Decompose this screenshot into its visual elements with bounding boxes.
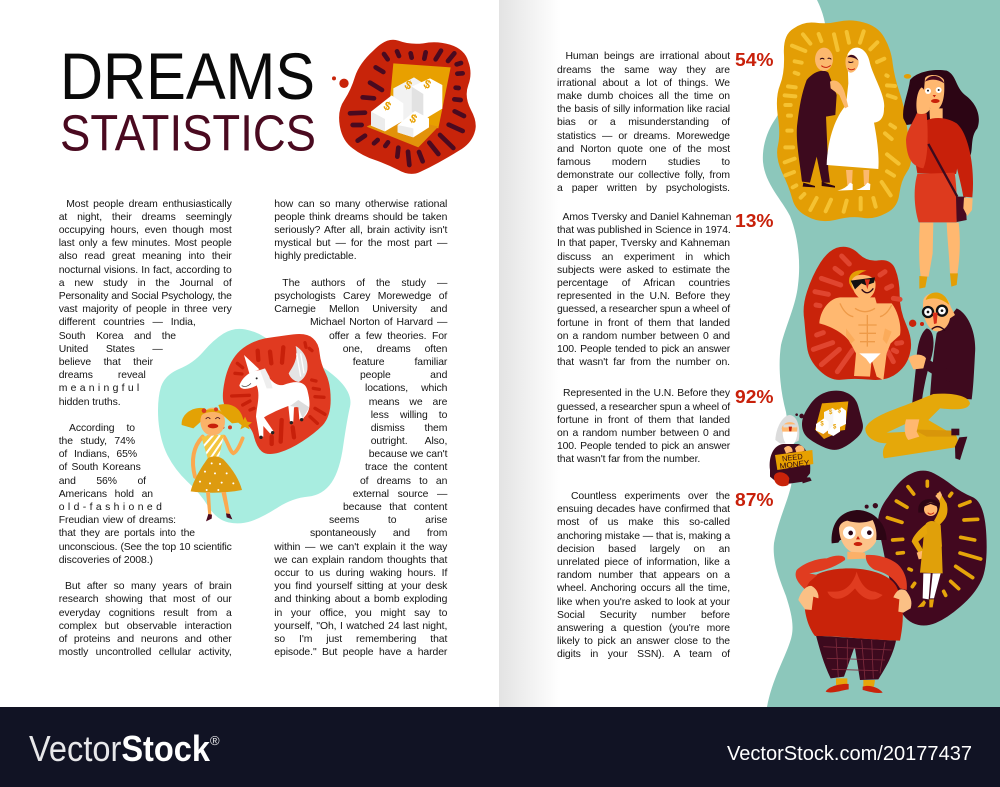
text column: left page, first column: believe that their	[59, 357, 153, 368]
dream cloud: muscle man	[804, 247, 911, 380]
dream cloud: wedding couple	[777, 20, 911, 221]
title line: dreams: DREAMS	[60, 39, 315, 113]
text column: left page, second column: Carnegie Mellon University and	[274, 304, 447, 315]
text column: left page, second column: because we can't	[369, 449, 447, 460]
footer image id: VectorStock.com/20177437	[727, 743, 972, 765]
text block: 87% paragraph: decision based largely on an	[557, 544, 730, 555]
text block: 87% paragraph: Social Security number before	[557, 610, 730, 621]
stat: 87%: 87%	[735, 490, 774, 510]
dream cloud: money case: $	[820, 421, 824, 427]
text block: 87% paragraph	[557, 491, 730, 660]
text column: left page, second column: seriously? After all, brain activity isn't	[274, 225, 447, 236]
text column: left page, first column: complex but observable interaction	[59, 621, 232, 632]
text column: left page, second column: highly predictable.	[274, 251, 357, 262]
text block: 87% paragraph: most of us make this so-called	[557, 517, 730, 528]
text column: left page, first column	[58, 199, 232, 658]
text block: 92% paragraph: 100. People tended to pick an answer	[557, 441, 730, 452]
text block: 92% paragraph: on a random number between 0 and	[557, 428, 730, 439]
text column: left page, first column: a new study in the Journal of	[59, 278, 232, 289]
text column: left page, first column: unconscious. (See the top 10 scientific	[59, 542, 232, 553]
text block: 13% paragraph: that was published in Science in 1974.	[557, 225, 731, 236]
icon: money case in red dream cloud: $	[402, 77, 415, 93]
text block: 92% paragraph	[557, 388, 730, 465]
footer logo: VectorStock: VectorStock	[29, 728, 211, 769]
stat: 92%: 92%	[735, 387, 774, 407]
text column: left page, second column: less willing to	[371, 410, 447, 421]
text column: left page, second column: people think dreams should be taken	[274, 212, 447, 223]
sign text: NEED	[782, 452, 804, 463]
text block: 54% paragraph: the basis of silly information like racial	[557, 104, 730, 115]
illustration: man dreaming of a muscular body	[770, 247, 975, 486]
text column: left page, first column: and 56% of	[59, 476, 146, 487]
text column: left page, first column: Americans hold an	[59, 489, 153, 500]
text column: left page, first column: of Indians, 65%	[59, 449, 137, 460]
text column: left page, first column: hidden truths.	[59, 396, 121, 408]
text column: left page, first column: the study, 74%	[59, 436, 135, 447]
text block: 13% paragraph: guessed, a researcher spun a wheel of	[557, 304, 730, 315]
illustration: heavy woman dreaming of being slim	[796, 471, 987, 693]
title	[60, 39, 316, 162]
text block: 92% paragraph: guessed, a researcher spun a wheel of	[557, 402, 730, 413]
text column: left page, second column: occur to us during waking hours. If	[274, 568, 447, 579]
dream cloud: money case: $	[833, 425, 837, 431]
text column: left page, second column: feature familiar	[353, 357, 447, 368]
text block: 13% paragraph	[557, 212, 731, 368]
sign text: MONEY	[779, 458, 810, 471]
text block: 13% paragraph: In that paper, Tversky and Kahneman	[557, 238, 730, 249]
text column: left page, second column: locations, which	[365, 383, 447, 394]
text column: left page, first column: also read great meaning into their	[59, 251, 232, 262]
text block: 92% paragraph: Represented in the U.N. Before they	[563, 388, 730, 399]
text block: 54% paragraph: dreams the same way they are	[557, 65, 730, 76]
text column: left page, second column: how can so many otherwise rational	[274, 199, 447, 210]
text column: left page, second column: of dreams to an	[360, 476, 447, 487]
text block: 54% paragraph: Human beings are irrational about	[566, 51, 730, 62]
text block: 13% paragraph: subjects were asked to estimate the	[557, 265, 730, 276]
text column: left page, first column: that they are portals into the	[59, 528, 195, 539]
illustration: woman dreaming of a wedding	[777, 20, 979, 289]
text column: left page, first column: dreams reveal	[59, 370, 146, 381]
text block: 87% paragraph: anchoring mistake — that is, making a	[557, 531, 730, 542]
dream cloud: slim woman	[878, 471, 987, 625]
text column: left page, second column: spontaneously and from	[310, 528, 447, 539]
text block: 54% paragraph	[557, 51, 730, 194]
text column: left page, first column: Freudian view of dreams:	[59, 515, 176, 526]
woman with phone and bag	[903, 70, 979, 289]
text block: 54% paragraph: demonstrate our collective folly, from	[557, 170, 730, 181]
footer registered mark: ®	[210, 733, 220, 748]
text column: left page, first column: everyday cognitions result from a	[59, 608, 232, 618]
text block: 13% paragraph: represented in the U.N. Before they	[557, 291, 730, 302]
text column: left page, first column: Most people dream enthusiastically	[66, 199, 232, 210]
text block: 92% paragraph: that wasn't far from the number.	[557, 454, 700, 465]
text column: left page, second column: offer a few theories. For	[329, 331, 447, 342]
text column: left page, second column: within — we can't explain it the way	[274, 542, 447, 553]
illustration: girl dreaming of a unicorn	[158, 329, 350, 523]
text block: 87% paragraph: ensuing decades have confirmed that	[557, 504, 730, 515]
text column: left page, second column: yourself, "Oh, I watched 24 last night,	[274, 621, 447, 632]
dream cloud: money case: $	[838, 409, 842, 415]
text column: left page, first column: research showing that most of our	[59, 594, 232, 605]
text column: left page, first column: South Korea and the	[59, 331, 176, 342]
text column: left page, second column: psychologists Carey Morewedge of	[274, 291, 447, 302]
text block: 54% paragraph: statistics — or dreams. Morewedge	[557, 131, 730, 142]
text column: left page, second column: Michael Norton of Harvard —	[310, 317, 447, 328]
text column: left page, second column: external source —	[353, 489, 447, 500]
text column: left page, second column: outright. Also,	[371, 436, 447, 447]
footer band	[0, 707, 1000, 787]
text column: left page, second column: people and	[360, 370, 447, 381]
text block: 13% paragraph: fortune in front of them that landed	[557, 318, 730, 329]
text block: 54% paragraph: irrational about a lot of things. We	[557, 78, 730, 89]
text column: left page, second column: we can explain random thoughts that	[274, 555, 447, 566]
title line: statistics: STATISTICS	[60, 104, 316, 162]
text block: 87% paragraph: likely to pick an answer close to the	[557, 636, 730, 647]
stat: 13%: 13%	[735, 211, 774, 231]
text column: left page, second column: means we are	[369, 396, 447, 408]
text column: left page, first column: vast majority of people in three very	[59, 304, 232, 315]
text block: 13% paragraph: Amos Tversky and Daniel Kahneman	[562, 212, 731, 223]
text block: 13% paragraph: 100. People tended to pick an answer	[557, 344, 730, 355]
dream cloud: money case: $	[829, 410, 833, 416]
text block: 54% paragraph: famous modern studies to	[557, 157, 730, 168]
text block: 87% paragraph: wheel. Anchoring occurs all the time,	[557, 583, 730, 594]
text column: left page, second column: you find yourself sitting at your desk	[274, 581, 447, 592]
text column: left page, first column: old-fashioned	[59, 502, 165, 513]
text column: left page, first column: nocturnal visions. In fact, according to	[59, 265, 232, 276]
text column: left page, second column	[274, 199, 448, 658]
text block: 87% paragraph: answering a question (you're more	[557, 623, 730, 634]
text block: 13% paragraph: that wasn't far from the number on.	[557, 357, 730, 368]
text block: 13% paragraph: on a random number between 0 and	[557, 331, 730, 342]
text column: left page, second column: trace the content	[365, 462, 447, 473]
text column: left page, first column: mostly uncontrolled cellular activity,	[59, 647, 232, 658]
text column: left page, second column: The authors of the study —	[282, 278, 447, 289]
text column: left page, second column: episode." But people have a harder	[274, 647, 447, 658]
text column: left page, second column: dismiss them	[371, 423, 447, 434]
heavy woman	[796, 503, 911, 693]
text column: left page, first column: of South Koreans	[59, 462, 141, 473]
text column: left page, first column: of proteins and neurons and other	[59, 634, 232, 645]
text column: left page, second column: so I'm just remembering that	[274, 634, 447, 645]
stat: 54%: 54%	[735, 50, 774, 70]
text column: left page, first column: last only a few minutes. Most people	[59, 238, 232, 249]
man with glasses	[865, 292, 975, 460]
text column: left page, second column: and thinking about a bomb exploding	[274, 594, 447, 605]
sign text	[778, 451, 810, 471]
text block: 54% paragraph: bias or a misunderstanding of	[557, 117, 730, 128]
text block: 87% paragraph: random number that appears on a	[557, 570, 730, 581]
text column: left page, second column: mystical but — for the most part —	[274, 238, 447, 249]
text column: left page, first column: discoveries of 2008.)	[59, 555, 153, 566]
text block: 13% paragraph: discuss an experiment in which	[557, 252, 730, 263]
page gutter shadow	[499, 0, 561, 707]
icon: money case in red dream cloud: $	[421, 77, 434, 92]
text block: 87% paragraph: like when you're asked to look at your	[557, 597, 730, 608]
text column: left page, first column: different countries — India,	[59, 317, 196, 328]
text block: 54% paragraph: a paper written by psychologists.	[557, 183, 730, 194]
text column: left page, second column: one, dreams often	[343, 344, 447, 355]
text column: left page, second column: in your office, you might say to	[274, 608, 447, 618]
icon: money case in red dream cloud: $	[381, 98, 394, 114]
text block: 54% paragraph: make dumb choices all the time on	[557, 91, 730, 102]
text column: left page, first column: But after so many years of brain	[65, 581, 232, 592]
text column: left page, first column: at night, their dreams seemingly	[59, 212, 232, 223]
icon: money case in red dream cloud	[332, 40, 476, 174]
dream cloud: money case	[795, 391, 863, 450]
text block: 13% paragraph: percentage of African countries	[557, 278, 730, 289]
text block: 87% paragraph: digits in your SSN). A team of	[557, 649, 730, 660]
text block: 87% paragraph: unrelated piece of information, like a	[557, 557, 730, 568]
text column: left page, first column: meaningful	[59, 383, 143, 394]
text column: left page, first column: Personality and Social Psychology, the	[59, 291, 232, 302]
icon: money case in red dream cloud: $	[407, 111, 420, 127]
text block: 87% paragraph: Countless experiments over the	[571, 491, 730, 502]
text column: left page, first column: According to	[69, 423, 135, 434]
text block: 54% paragraph: and Norton quote one of the most	[557, 144, 730, 155]
text block: 92% paragraph: fortune in front of them that landed	[557, 415, 730, 426]
teal background wave	[763, 0, 1000, 707]
text column: left page, second column: seems to arise	[329, 515, 447, 526]
beggar with need money sign	[770, 415, 813, 486]
text column: left page, first column: United States —	[59, 344, 163, 355]
text column: left page, first column: occupying hours, even though most	[59, 225, 232, 236]
text column: left page, second column: because that content	[343, 502, 447, 513]
